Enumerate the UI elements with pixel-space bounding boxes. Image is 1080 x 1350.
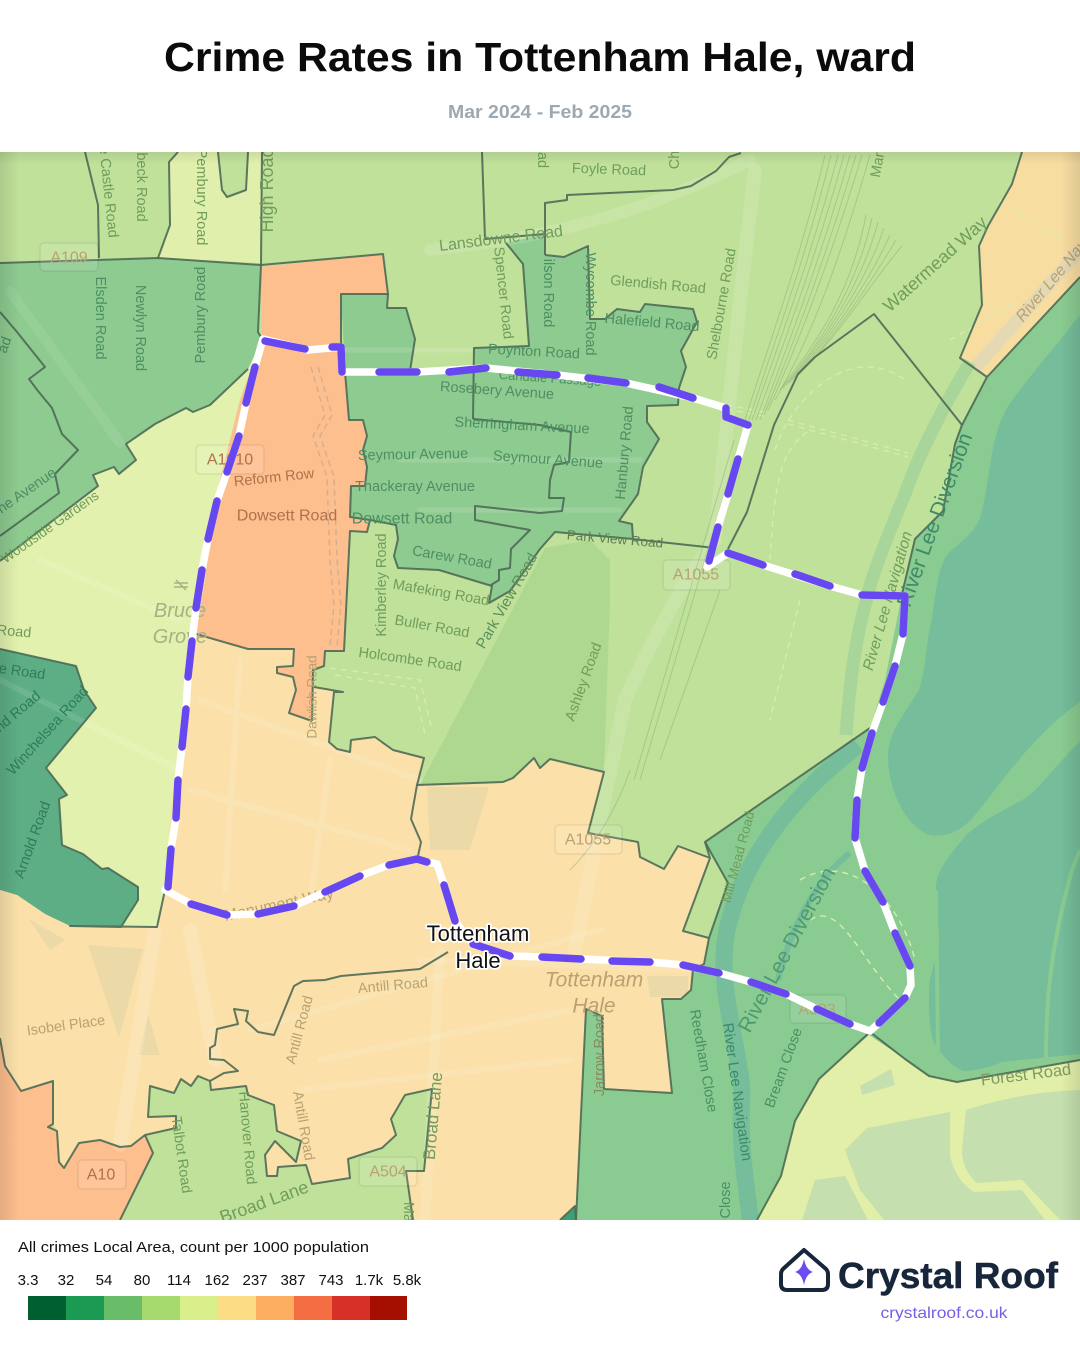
area: orange high crime xyxy=(196,254,388,721)
area: dark green west xyxy=(0,649,138,927)
street labels on green: Candale Passage xyxy=(498,367,602,389)
street labels on green: Rosebery Avenue xyxy=(439,379,555,403)
legend scale labels: 237 xyxy=(242,1272,268,1289)
street labels on green: Dowsett Road xyxy=(352,510,452,528)
street labels on green: Newlyn Road xyxy=(132,285,148,371)
area: green north block xyxy=(341,294,415,372)
boundary lines xyxy=(0,152,1080,1220)
street labels on cream xyxy=(26,236,1080,1162)
street labels on light green: Mill Mead Road xyxy=(719,810,757,904)
street labels on light green: Ashley Road xyxy=(562,641,606,723)
street labels on orange: Reform Row xyxy=(233,466,315,490)
street labels on green: River Lee Diversion xyxy=(893,430,977,610)
map edge shading xyxy=(0,152,1080,1220)
railway tracks xyxy=(570,155,902,870)
street labels on green xyxy=(0,252,977,1219)
area: cream north-east xyxy=(960,152,1080,377)
street labels on green: Seymour Avenue xyxy=(492,448,604,472)
road shields xyxy=(40,243,846,1189)
legend scale labels: 1.7k xyxy=(355,1272,384,1289)
street labels on cream: Dawlish Road xyxy=(304,655,320,739)
street labels on light green: Glendish Road xyxy=(610,273,706,297)
shield: A503: A503 xyxy=(798,1002,836,1018)
legend scale labels: 32 xyxy=(58,1272,74,1289)
street labels on green: Thackeray Avenue xyxy=(355,479,475,495)
shield: A10: A10 xyxy=(87,1166,115,1184)
area: pale park south-east xyxy=(802,1069,1080,1220)
street labels on cream: Antill Road xyxy=(289,1090,317,1162)
street labels on light green: Holcombe Road xyxy=(357,645,463,675)
street labels on light green: Lansdowne Road xyxy=(438,223,564,255)
place label: Tottenham Hale: Hale xyxy=(455,948,501,973)
shield: A1010 xyxy=(196,445,264,474)
area: green north-west xyxy=(0,258,262,561)
street labels on light green: Broad Lane xyxy=(420,1071,446,1161)
legend scale labels: 5.8k xyxy=(393,1272,422,1289)
area: east green xyxy=(576,277,1080,1220)
legend scale labels: 114 xyxy=(167,1272,191,1289)
street labels on green: Arnold Road xyxy=(12,799,54,881)
street labels on light green: Mar xyxy=(868,151,888,179)
icon: rail station xyxy=(174,580,188,590)
legend title: All crimes Local Area, count per 1000 population xyxy=(18,1239,369,1256)
street labels on cream: Isobel Place xyxy=(26,1013,106,1039)
street labels on light green: Talbot Road xyxy=(168,1116,194,1194)
street labels on green: Bream Close xyxy=(762,1026,806,1110)
footpaths in east park xyxy=(330,200,1060,1000)
street labels on light green: Buller Road xyxy=(393,613,471,641)
legend scale labels: 162 xyxy=(204,1272,230,1289)
railway dashed line through orange ward xyxy=(311,367,341,646)
legend scale labels: 3.3 xyxy=(18,1272,38,1289)
shield: A1055 north xyxy=(663,560,730,590)
area: park green xyxy=(420,540,610,785)
street labels on orange xyxy=(234,470,336,520)
street labels on green: Elsden Road xyxy=(92,276,108,360)
street labels on light green: Hanover Road xyxy=(235,1091,259,1185)
road band north-east xyxy=(975,250,1080,368)
ward boundary purple dashes xyxy=(168,341,910,1024)
street labels on green: Winchelsea Road xyxy=(4,683,92,779)
street labels on green: River Lee Navigation xyxy=(719,1022,755,1162)
area: railway land patches on cream xyxy=(28,787,688,1055)
street labels on light green: Ma xyxy=(400,1202,416,1223)
street labels on light green: Pembury Road xyxy=(193,149,209,245)
area: pale south-east xyxy=(757,1035,1080,1220)
street labels on cream: Tottenham xyxy=(545,968,643,992)
area: orange south-west xyxy=(0,1038,153,1220)
street labels on light green: Forest Road xyxy=(980,1061,1072,1089)
area: green central block xyxy=(345,234,697,603)
street labels on green: Carew Road xyxy=(411,543,493,573)
water: lake south xyxy=(929,742,1080,1071)
legend scale labels xyxy=(18,1272,422,1289)
water: river channels xyxy=(724,362,970,1220)
street labels on green: Hanbury Road xyxy=(613,406,637,500)
area: top green notch xyxy=(218,152,248,197)
street labels on light green: Foyle Road xyxy=(572,161,646,179)
street labels on light green: Kimberley Road xyxy=(374,533,390,637)
shield: A1055 north: A1055 xyxy=(673,566,719,584)
street labels on light green: Park View Road xyxy=(566,527,664,551)
shield: A1055 south xyxy=(555,825,622,854)
street labels on light green: Mafeking Road xyxy=(392,577,490,609)
legend colour scale xyxy=(28,1296,407,1320)
street labels on light green: Park View Road xyxy=(473,550,541,652)
shield: A503 xyxy=(790,995,846,1023)
street labels on cream: Jarrow Road xyxy=(592,1014,608,1096)
street labels on green: Seymour Avenue xyxy=(358,446,468,464)
street labels on green: Poynton Road xyxy=(488,342,580,362)
street labels on green: River Lee Diversion xyxy=(734,864,840,1036)
legend scale labels: 387 xyxy=(280,1272,306,1289)
roads xyxy=(0,160,755,1220)
place label: Tottenham Hale xyxy=(427,921,529,973)
legend scale labels: 54 xyxy=(96,1272,112,1289)
street labels on light green: Bruce xyxy=(154,600,206,622)
area: pale yellow top xyxy=(158,152,262,263)
street labels on cream: Antill Road xyxy=(357,975,429,997)
street labels on green: Reedham Close xyxy=(686,1008,720,1114)
street labels on green: Wycombe Road xyxy=(582,252,598,356)
subtitle: date range: Mar 2024 - Feb 2025 xyxy=(448,102,632,122)
street labels on green: Halefield Road xyxy=(604,311,700,335)
shield: A1055 south: A1055 xyxy=(565,832,611,848)
street labels on light green: Grove xyxy=(153,626,207,648)
shield: A109: A109 xyxy=(50,250,88,266)
street labels on orange: Dowsett Road xyxy=(237,508,337,524)
street labels on light green xyxy=(0,145,1072,1227)
street labels on light green: e Castle Road xyxy=(95,145,121,239)
street labels on green: Sherringham Avenue xyxy=(454,414,590,438)
shield: A504: A504 xyxy=(369,1164,407,1180)
website url: crystalroof.co.uk xyxy=(880,1305,1009,1322)
shield: A504 xyxy=(359,1157,417,1186)
title: Crime Rates in Tottenham Hale, ward xyxy=(164,34,916,80)
shield: A1010: A1010 xyxy=(207,452,253,468)
street labels on light green: River Lee Navigation xyxy=(860,529,916,673)
legend scale labels: 80 xyxy=(134,1272,150,1289)
street labels on cream: Antill Road xyxy=(283,994,317,1066)
street labels on light green: Broad Lane xyxy=(217,1177,311,1227)
area: cream central and south xyxy=(0,634,710,1220)
street labels on light green: High Road xyxy=(257,147,277,233)
place label: Tottenham Hale: Tottenham xyxy=(427,921,529,946)
street labels on cream: Hale xyxy=(572,994,616,1018)
shield: A109 xyxy=(40,243,98,271)
street labels on green: ilson Road xyxy=(540,259,556,327)
causeways across the lakes xyxy=(936,850,1080,1060)
water: lake north xyxy=(888,315,1080,836)
street labels on light green: Watermead Way xyxy=(879,212,991,316)
street labels on green: Close xyxy=(718,1181,734,1219)
street labels on light green: ad xyxy=(534,152,550,168)
street labels on light green: Ch xyxy=(667,151,683,169)
street labels on light green: Woodside Gardens xyxy=(0,488,102,566)
street labels on light green: beck Road xyxy=(133,152,149,222)
street labels on light green: Shelbourne Road xyxy=(704,247,740,361)
street labels on cream: Monument Way xyxy=(223,885,335,925)
logo wordmark: Crystal Roof xyxy=(838,1255,1059,1296)
street labels on green: Pembury Road xyxy=(193,267,209,363)
legend scale labels: 743 xyxy=(318,1272,344,1289)
icon: Crystal Roof house logo xyxy=(781,1250,828,1290)
street labels on light green: Spencer Road xyxy=(490,246,516,340)
ward boundary casing xyxy=(165,339,911,1031)
area: pale yellow west xyxy=(0,339,262,927)
shield: A10 xyxy=(78,1160,126,1189)
